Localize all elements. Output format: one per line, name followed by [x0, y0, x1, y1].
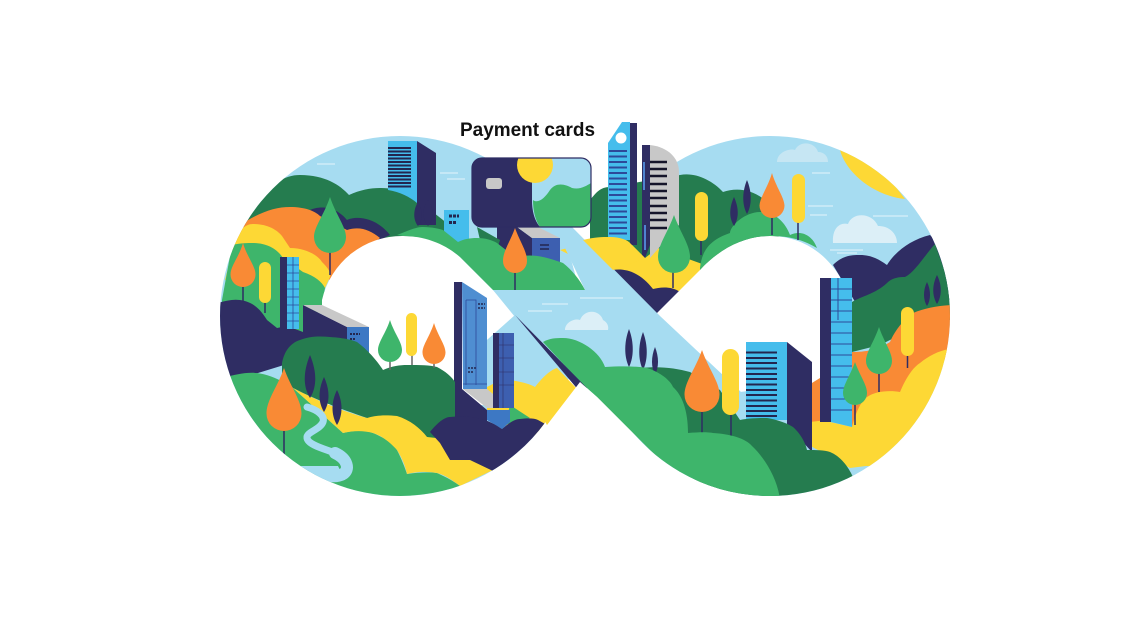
card: chip: [486, 178, 502, 189]
stream: [295, 407, 347, 482]
infographic: infinity landscape: [220, 122, 950, 496]
building: top left tower: [388, 141, 436, 225]
hill: green lower left: [210, 373, 460, 510]
building: small top centre: [477, 227, 560, 265]
building: lower right: [746, 342, 812, 452]
infinity scene: [210, 122, 955, 510]
hill: yellow lower left: [293, 388, 493, 486]
trees: lower left: [266, 355, 342, 455]
card: green wave: [533, 183, 591, 227]
trees: top right: [658, 173, 805, 288]
hill: navy bottom centre: [430, 416, 570, 495]
trees: right side: [843, 307, 914, 425]
building: left block: [303, 305, 369, 355]
card: navy panel: [472, 158, 540, 227]
hill: lower right dark green: [644, 367, 852, 496]
building: left thin tower: [280, 257, 299, 329]
card: sun: [517, 147, 553, 183]
trees: inside left hole: [378, 313, 446, 370]
trees: top left tower: [414, 204, 429, 226]
building: tall tower with circle: [608, 122, 637, 245]
hills: top centre: [560, 174, 780, 315]
card: [472, 147, 591, 227]
sky background: [210, 130, 960, 500]
band details: [528, 298, 623, 330]
heading: Payment cards: Payment cards: [460, 120, 595, 141]
hill: navy far left: [220, 300, 303, 377]
hill: green mound under card: [397, 227, 585, 290]
card: outline: [472, 158, 591, 227]
hills: top left: [222, 175, 444, 332]
tree: orange under card: [503, 228, 527, 290]
trees: top left: [230, 197, 346, 313]
hole: left: [322, 236, 515, 405]
hill: big green band: [543, 338, 780, 500]
band sky strip: [493, 228, 741, 392]
hills: bottom left sky patch: [487, 336, 492, 340]
hills: right side: [812, 235, 950, 468]
hills: top right green mound: [700, 212, 817, 270]
hill: yellow over tower bases: [583, 237, 645, 270]
hill: green behind centre building: [507, 408, 530, 424]
building: top right grey tower: [642, 145, 679, 258]
hill: dark green centre left: [282, 336, 455, 445]
trees: lower centre: [625, 329, 739, 436]
sun: [840, 150, 905, 199]
hole: right: [656, 236, 852, 392]
building: right tower: [820, 278, 852, 427]
hill: yellow centre: [487, 368, 576, 436]
building: small cyan: [444, 210, 469, 243]
sliver: navy diagonal: [515, 315, 587, 392]
building: centre second tower: [493, 333, 514, 408]
sky details: clouds and lines: [317, 143, 908, 253]
building: centre tall tower: [454, 282, 510, 429]
